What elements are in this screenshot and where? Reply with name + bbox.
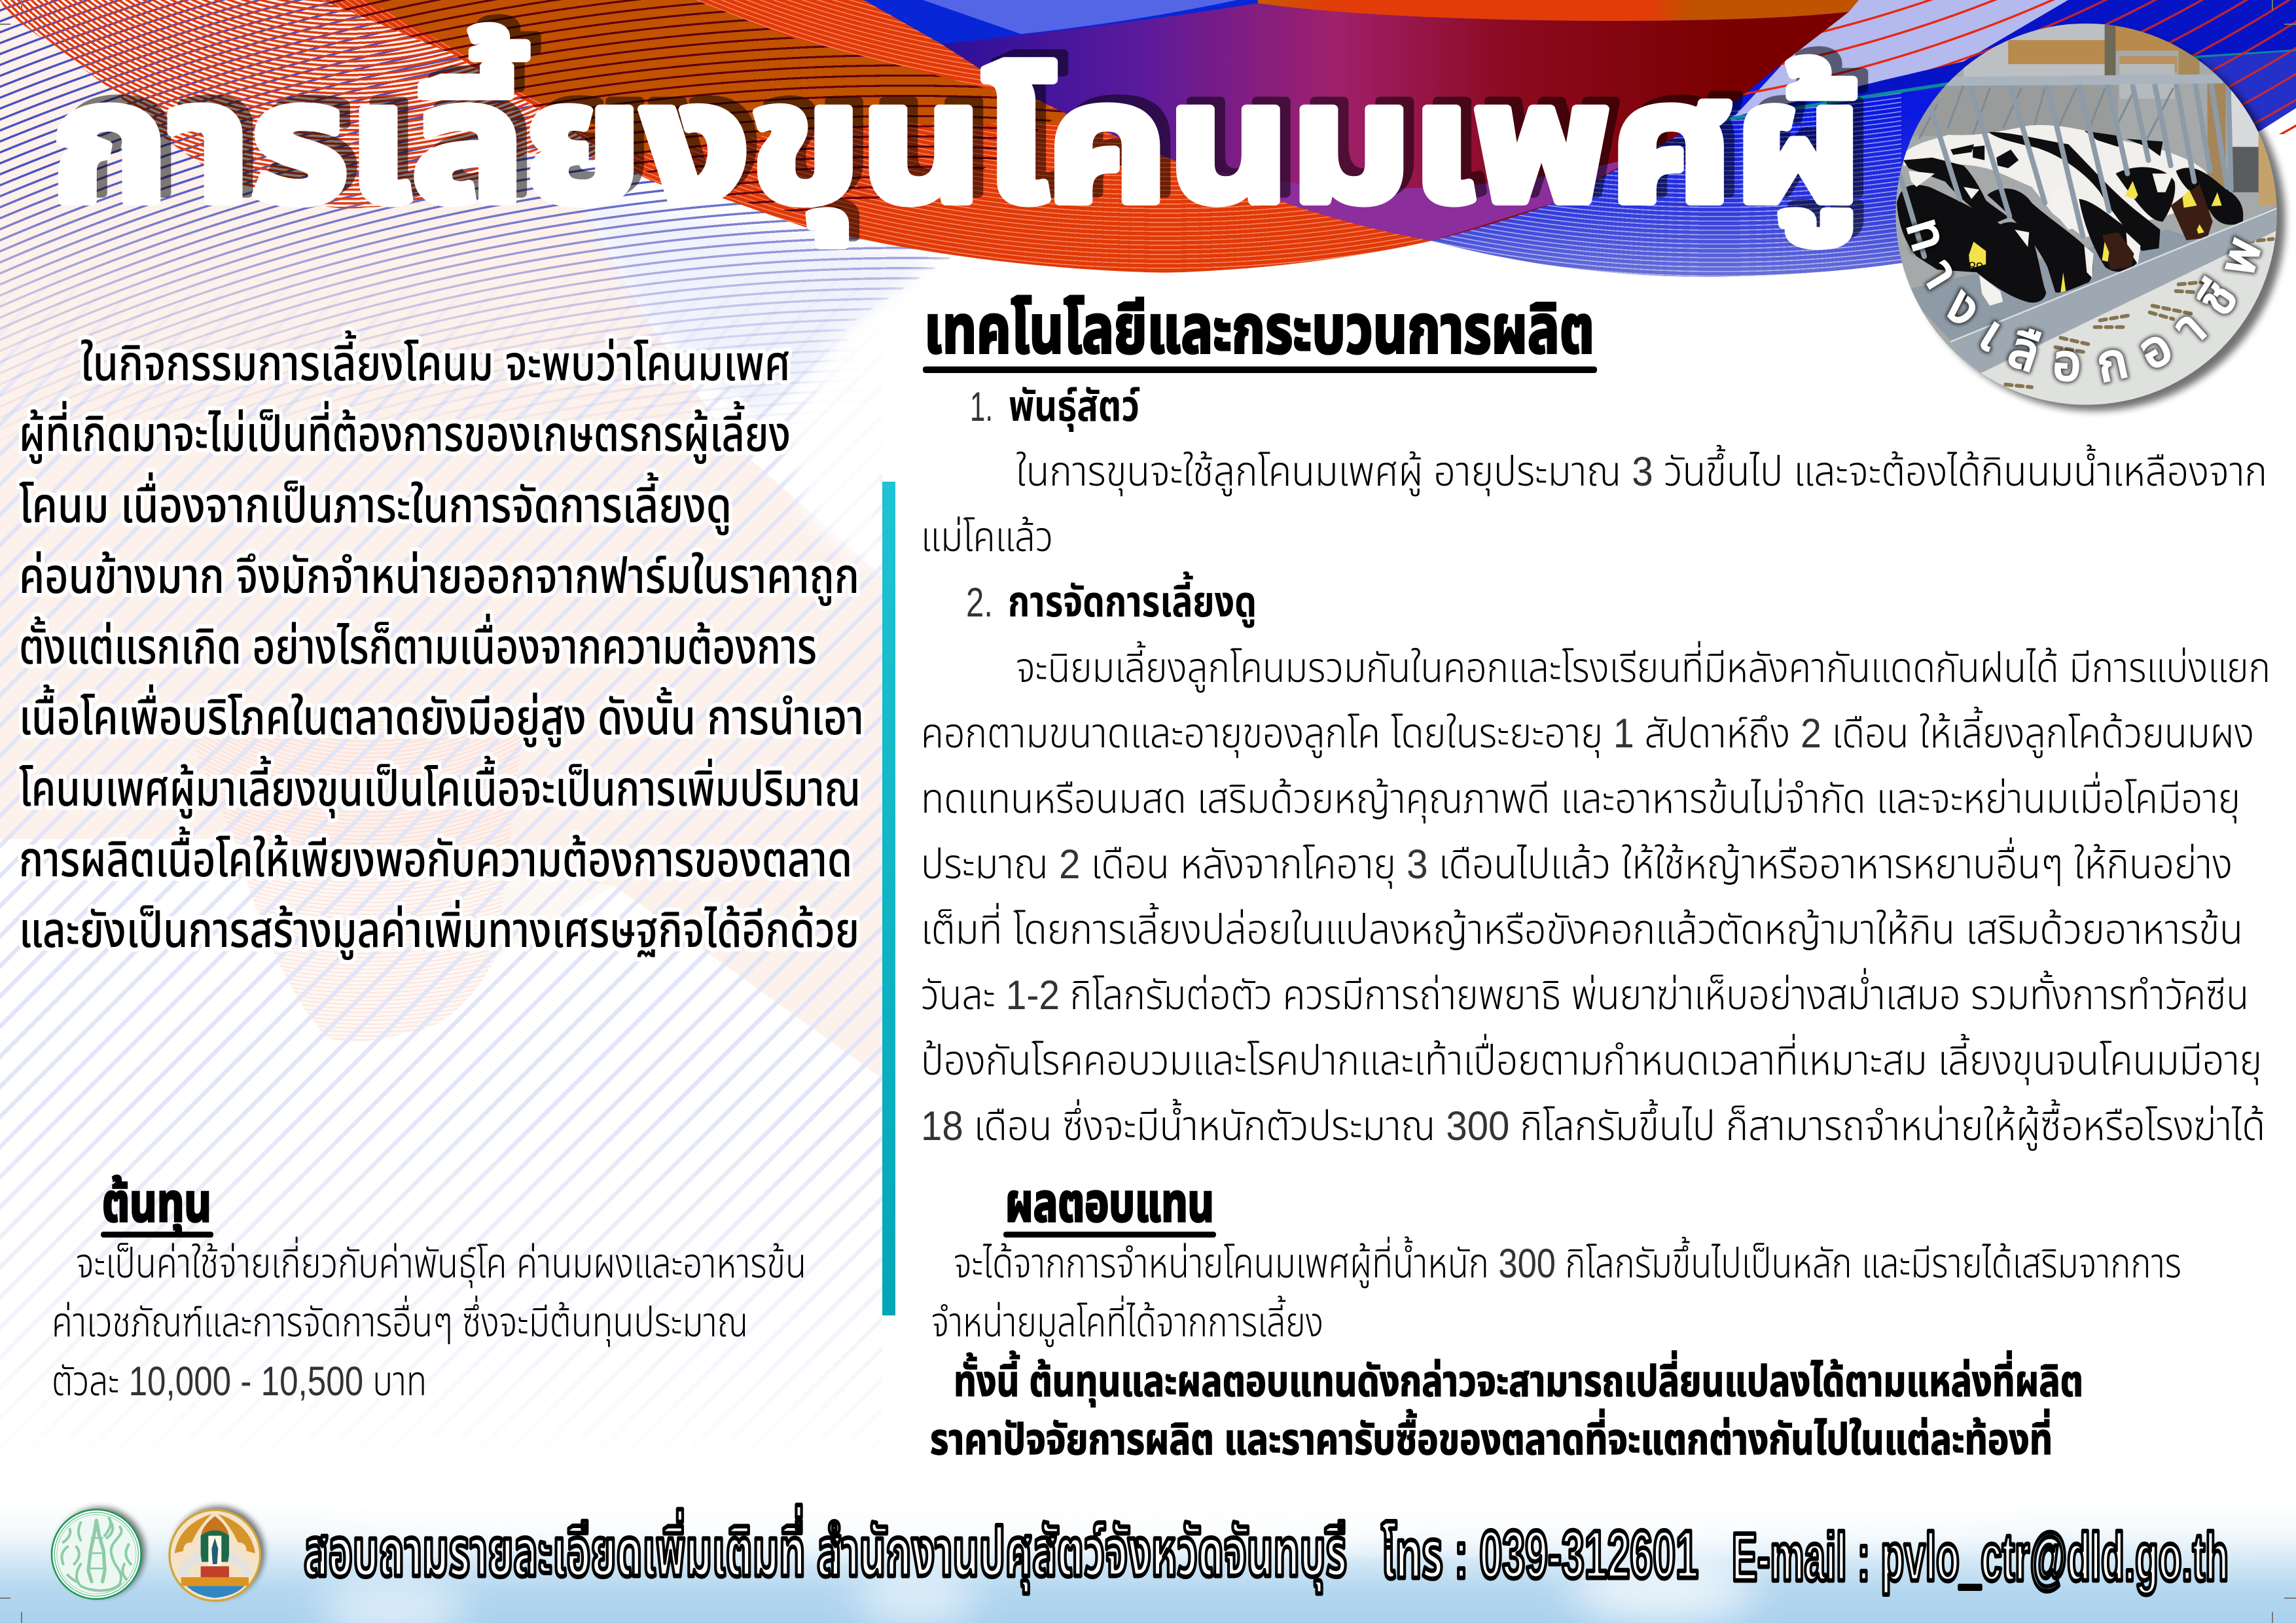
big blue circle <box>864 0 2296 277</box>
purple lower lens <box>1178 157 1636 241</box>
heading: technology and production: เทคโนโลยีและกระบวนการผลิต <box>924 292 1594 368</box>
section 1 text: แม่โคแล้ว <box>921 514 1053 560</box>
straw <box>2005 239 2273 387</box>
title shadow: การเลี้ยงขุนโคนมเพศผู้ <box>62 18 1873 238</box>
left intro paragraph: ค่อนข้างมาก จึงมักจำหน่ายออกจากฟาร์มในราคาถูก <box>19 548 859 606</box>
photo shadow <box>1904 29 2286 411</box>
pale orange hatch <box>851 45 1060 111</box>
gate bars <box>1899 84 2231 257</box>
bold note: ราคาปัจจัยการผลิต และราคารับซื้อของตลาดที่จะแตกต่างกันไปในแต่ละท้องที่ <box>930 1409 2053 1463</box>
top rail <box>1945 79 2223 81</box>
pale pink wash <box>0 0 882 1079</box>
tag number: 38 <box>1968 259 1984 274</box>
section 2 text: ประมาณ 2 เดือน หลังจากโคอายุ 3 เดือนไปแล้ว ให้ใช้หญ้าหรืออาหารหยาบอื่นๆ ให้กินอย่าง <box>921 837 2233 889</box>
left intro paragraph: ตั้งแต่แรกเกิด อย่างไรก็ตามเนื่องจากความต้องการ <box>19 613 817 674</box>
pale hatched blue with red lines <box>1734 0 2068 116</box>
white head mark and snout <box>1909 171 2174 306</box>
white fade right <box>785 242 987 576</box>
cost text: จะเป็นค่าใช้จ่ายเกี่ยวกับค่าพันธุ์โค ค่านมผงและอาหารข้น <box>76 1236 806 1288</box>
right hatched blue <box>2199 51 2296 131</box>
pale lobe rings <box>234 839 614 1041</box>
left intro paragraph: โคนมเพศผู้มาเลี้ยงขุนเป็นโคเนื้อจะเป็นการเพิ่มปริมาณ <box>19 755 861 819</box>
base <box>201 1566 229 1577</box>
logo: green department seal <box>52 1507 145 1599</box>
returns text: จะได้จากการจำหน่ายโคนมเพศผู้ที่น้ำหนัก 300 กิโลกรัมขึ้นไปเป็นหลัก และมีรายได้เสริมจากการ <box>954 1236 2181 1289</box>
bold note: ทั้งนี้ ต้นทุนและผลตอบแทนดังกล่าวจะสามารถเปลี่ยนแปลงได้ตามแหล่งที่ผลิต <box>954 1351 2083 1407</box>
pale blue wash <box>579 196 936 419</box>
dark lines on ochre and red <box>322 0 1064 216</box>
section 1 heading: พันธุ์สัตว์ <box>1009 382 1139 432</box>
left intro paragraph: ผู้ที่เกิดมาจะไม่เป็นที่ต้องการของเกษตรกรผู้เลี้ยง <box>19 401 791 464</box>
curved caption: ทางเลือกอาชีพ <box>1906 219 2261 383</box>
brown calf heads <box>2102 185 2213 270</box>
section 1 text: ในการขุนจะใช้ลูกโคนมเพศผู้ อายุประมาณ 3 วันขึ้นไป และจะต้องได้กินนมน้ำเหลืองจาก <box>1016 444 2267 497</box>
heading: returns: ผลตอบแทน <box>1005 1173 1214 1233</box>
photo content <box>1895 24 2277 404</box>
heading: cost: ต้นทุน <box>102 1173 211 1235</box>
horses <box>178 1548 202 1577</box>
photo: calves in feeding pen <box>1895 24 2291 416</box>
section 2 heading: การจัดการเลี้ยงดู <box>1008 571 1257 628</box>
section 2 text: 18 เดือน ซึ่งจะมีน้ำหนักตัวประมาณ 300 กิโลกรัมขึ้นไป ก็สามารถจำหน่ายให้ผู้ซื้อหรือโรงฆ่าได้ <box>921 1099 2265 1151</box>
orange-red crescent <box>322 0 1859 273</box>
dark blue band <box>1734 0 2296 118</box>
upper arc lines <box>0 0 951 421</box>
right body text <box>921 382 2270 1151</box>
returns text <box>931 1236 2181 1347</box>
hatched red lobe <box>0 0 622 208</box>
lower diagonal lines <box>0 304 882 1366</box>
ornament flames <box>175 1514 211 1553</box>
section 2 text: คอกตามขนาดและอายุของลูกโค โดยในระยะอายุ 1 สัปดาห์ถึง 2 เดือน ให้เลี้ยงลูกโคด้วยนมผง <box>921 706 2254 758</box>
cost text: ตัวละ 10,000 - 10,500 บาท <box>52 1359 427 1404</box>
section 1 heading: 1. <box>970 384 993 430</box>
bold note <box>930 1351 2083 1463</box>
floor <box>1981 230 2276 404</box>
cost text: ค่าเวชภัณฑ์และการจัดการอื่นๆ ซึ่งจะมีต้นทุนประมาณ <box>52 1295 748 1347</box>
cost text <box>52 1236 806 1404</box>
left intro paragraph <box>19 330 864 960</box>
left intro paragraph: เนื้อโคเพื่อบริโภคในตลาดยังมีอยู่สูง ดังนั้น การนำเอา <box>19 684 864 747</box>
deity figure <box>211 1538 218 1564</box>
left intro paragraph: การผลิตเนื้อโคให้เพียงพอกับความต้องการของตลาด <box>19 826 852 887</box>
white back cows <box>1903 125 2208 238</box>
section 2 heading <box>966 571 1257 628</box>
outer feed trough <box>1950 208 2277 372</box>
section 1 heading <box>970 382 1139 432</box>
section 2 text: เต็มที่ โดยการเลี้ยงปล่อยในแปลงหญ้าหรือขังคอกแล้วตัดหญ้ามาให้กิน เสริมด้วยอาหารข้น <box>921 902 2243 953</box>
section 2 text <box>921 641 2270 1151</box>
footer blue gradient band <box>0 1505 2296 1623</box>
left intro paragraph: ในกิจกรรมการเลี้ยงโคนม จะพบว่าโคนมเพศ <box>81 330 791 391</box>
water waves <box>187 1586 244 1598</box>
inner trough <box>1911 206 2277 340</box>
blue top wedge <box>864 0 1258 44</box>
title with shadow <box>51 18 1873 245</box>
ear tags <box>1969 181 2222 293</box>
ochre band <box>367 0 1080 157</box>
top orange lens <box>1258 0 1859 21</box>
section 1 text <box>921 444 2267 560</box>
returns text: จำหน่ายมูลโคที่ได้จากการเลี้ยง <box>931 1295 1323 1347</box>
teal vertical divider <box>882 482 895 1315</box>
curved caption shadow: ทางเลือกอาชีพ <box>1906 220 2265 387</box>
left intro paragraph: โคนม เนื่องจากเป็นภาระในการจัดการเลี้ยงดู <box>19 472 732 535</box>
back lattice <box>1919 86 2174 139</box>
section 2 heading: 2. <box>966 580 993 626</box>
logo: gold provincial seal <box>170 1507 264 1601</box>
black patches <box>1897 131 2243 303</box>
dark lens <box>941 3 1849 241</box>
left intro paragraph: และยังเป็นการสร้างมูลค่าเพิ่มทางเศรษฐกิจได้อีกด้วย <box>19 899 859 960</box>
title text: การเลี้ยงขุนโคนมเพศผู้ <box>51 26 1863 245</box>
footer contact line: สอบถามรายละเอียดเพิ่มเติมที่ สำนักงานปศุสัตว์จังหวัดจันทบุรี <box>304 1505 1347 1594</box>
footer contact line: โทร : 039-312601 <box>1381 1517 1698 1593</box>
